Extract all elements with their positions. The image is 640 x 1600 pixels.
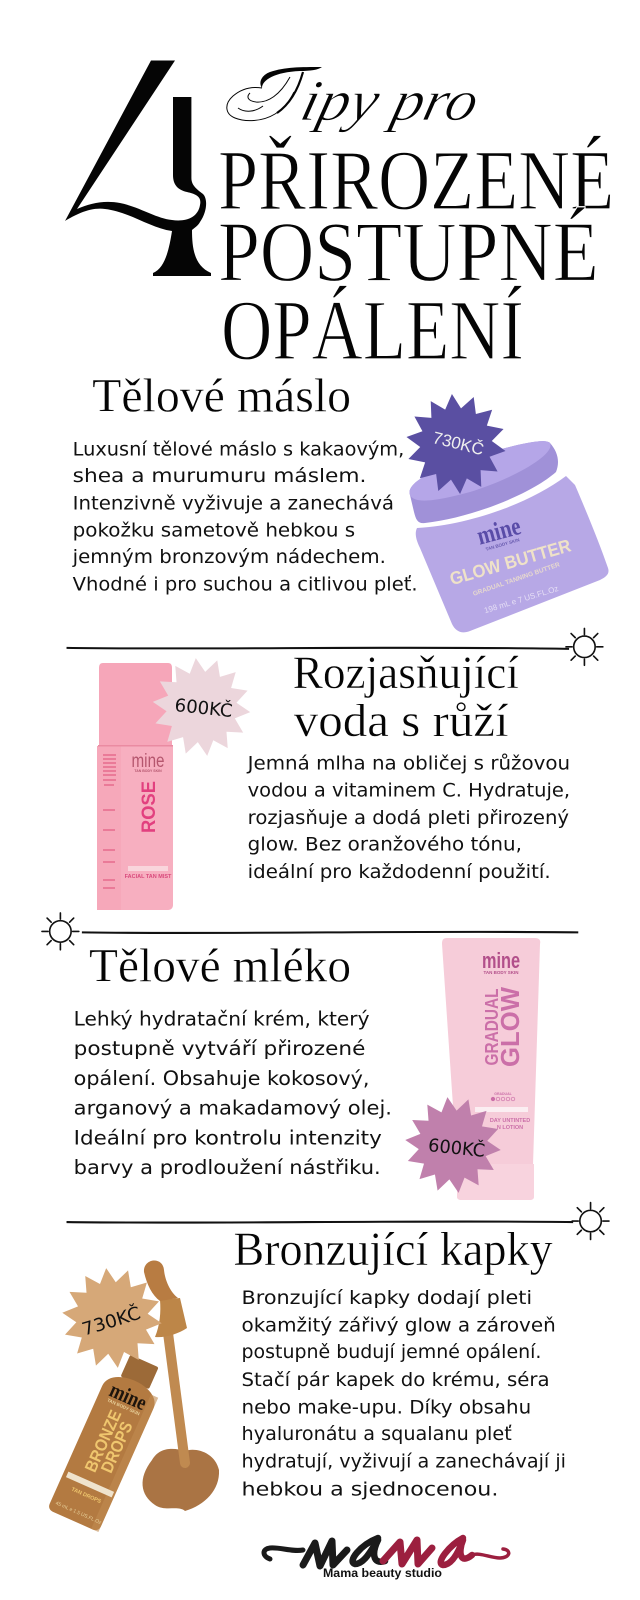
price badge: 730 Kč — [400, 389, 512, 499]
bottle: mine — [106, 1377, 151, 1415]
description: Tělové máslo: jemným bronzovým nádechem. — [72, 547, 386, 568]
description: Tělové mléko — [74, 1008, 392, 1179]
description: Tělové mléko: barvy a prodloužení nástřiku. — [74, 1156, 381, 1179]
description: Rozjasňující voda — [247, 754, 570, 883]
product: Gradual Glow lotion tube: DAY UNTINTED — [490, 1118, 530, 1124]
product: Glow Butter jar: 198 mL e 7 US.FL.Oz — [483, 584, 559, 615]
section 3: Tělové mléko — [74, 938, 540, 1200]
product: Gradual Glow lotion tube: N LOTION — [497, 1125, 523, 1131]
price badge: 600 Kč — [148, 654, 255, 760]
heading: Tělové mléko: Tělové mléko — [89, 940, 351, 993]
bottle: BRONZE — [81, 1407, 125, 1475]
heading: Rozjasňující voda s růží: voda s růží — [294, 695, 509, 747]
product: Gradual Glow lotion tube: GLOW — [495, 987, 525, 1067]
description: Tělové máslo: Intenzivně vyživuje a zanechává — [73, 494, 394, 515]
bottle: TAN DROPS — [70, 1487, 102, 1505]
logo: Mama beauty studio — [264, 1538, 509, 1580]
product swatch blob — [143, 1449, 219, 1511]
section 2: Rozjasňující voda s růží — [97, 647, 570, 910]
icon: sun — [42, 913, 79, 950]
title block — [65, 60, 614, 378]
logo: Mama beauty studio: Mama beauty studio — [323, 1566, 442, 1580]
description: Rozjasňující voda: ideální pro každodenní použití. — [248, 862, 551, 883]
description: Bronzující kapky: Bronzující kapky dodají pleti — [242, 1288, 532, 1309]
description: Bronzující kapky — [242, 1288, 566, 1500]
description: Bronzující kapky: nebo make-upu. Díky obsahu — [242, 1397, 531, 1418]
description: Rozjasňující voda: Jemná mlha na obličej s růžovou — [247, 754, 570, 775]
icon: sun — [566, 628, 603, 665]
product: Bronze Drops bottle and dropper — [47, 1260, 219, 1532]
script line: Tipy pro — [222, 60, 486, 137]
description: Tělové mléko: arganový a makadamový olej. — [74, 1097, 392, 1120]
heading: Tělové máslo: Tělové máslo — [92, 369, 351, 422]
large decorative numeral 4 — [65, 61, 211, 320]
product: Gradual Glow lotion tube: GRADUAL — [482, 989, 502, 1066]
dropper rod — [168, 1333, 185, 1463]
description: Bronzující kapky: hyaluronátu a squalanu pleť — [242, 1424, 512, 1445]
heading: Rozjasňující voda s růží — [293, 647, 519, 747]
product: Glow Butter jar: TAN BODY SKIN — [485, 537, 520, 552]
description: Tělové máslo: shea a murumuru máslem. — [73, 466, 366, 487]
description: Bronzující kapky: hebkou a sjednocenou. — [242, 1479, 498, 1500]
description: Tělové máslo: pokožku sametově hebkou s — [73, 520, 355, 541]
heading: Bronzující kapky: Bronzující kapky — [233, 1223, 553, 1276]
product: Glow Butter jar: GRADUAL TANNING BUTTER — [472, 561, 561, 598]
divider with sun 3 — [67, 1203, 609, 1239]
product: Gradual Glow lotion tube — [442, 938, 540, 1200]
bottle — [47, 1349, 170, 1532]
divider with sun 2 — [42, 913, 578, 950]
price badge: 600 Kč: 600KČ — [174, 694, 234, 722]
headline: POSTUPNÉ: POSTUPNÉ — [218, 203, 599, 299]
description: Tělové máslo: Vhodné i pro suchou a citlivou pleť. — [73, 575, 418, 596]
bottle: DROPS — [97, 1419, 137, 1476]
headline: OPÁLENÍ: OPÁLENÍ — [221, 282, 524, 378]
product: Glow Butter jar: GLOW BUTTER — [448, 535, 573, 589]
product: Gradual Glow lotion tube: GRADUAL — [494, 1092, 513, 1096]
price badge: 730 Kč: 730KČ — [79, 1302, 143, 1341]
description: Bronzující kapky: hydratují, vyživují a zanechávají ji — [242, 1452, 566, 1473]
description: Rozjasňující voda: rozjasňuje a dodá pleti přirozený — [248, 808, 569, 829]
product: Glow Butter jar: mine — [474, 511, 524, 550]
description: Tělové mléko: Ideální pro kontrolu intenzity — [74, 1126, 382, 1149]
product: Rose facial tan mist: mine — [132, 751, 165, 772]
section 1: Tělové máslo — [72, 369, 609, 632]
price badge: 600 Kč: 600KČ — [427, 1134, 486, 1162]
description: Tělové mléko: opálení. Obsahuje kokosový, — [74, 1067, 369, 1090]
product: Rose facial tan mist — [97, 663, 173, 910]
description: Tělové máslo — [72, 439, 418, 596]
product: Gradual Glow lotion tube: TAN BODY SKIN — [483, 970, 519, 975]
description: Rozjasňující voda: vodou a vitaminem C. Hydratuje, — [248, 780, 570, 801]
product: Rose facial tan mist: ROSE — [139, 781, 160, 833]
bottle: TAN BODY SKIN — [106, 1397, 141, 1416]
description: Tělové mléko: postupně vytváří přirozené — [74, 1037, 365, 1060]
description: Rozjasňující voda: glow. Bez oranžového tónu, — [248, 835, 522, 856]
description: Bronzující kapky: postupně budují jemné opálení. — [242, 1342, 541, 1363]
heading: Rozjasňující voda s růží: Rozjasňující — [293, 647, 519, 699]
product: Rose facial tan mist: FACIAL TAN MIST — [125, 874, 172, 880]
product: Gradual Glow lotion tube: mine — [482, 948, 520, 973]
description: Tělové máslo: Luxusní tělové máslo s kakaovým, — [73, 439, 404, 460]
price badge: 730 Kč — [57, 1264, 167, 1372]
price badge: 730 Kč: 730KČ — [431, 428, 486, 459]
price badge: 600 Kč — [400, 1093, 506, 1197]
section 4: Bronzující kapky — [47, 1223, 566, 1532]
description: Tělové mléko: Lehký hydratační krém, který — [74, 1008, 369, 1031]
description: Bronzující kapky: okamžitý zářivý glow a zároveň — [242, 1316, 556, 1337]
divider with sun 1 — [67, 628, 603, 665]
dropper collar — [155, 1298, 187, 1337]
description: Bronzující kapky: Stačí pár kapek do krému, séra — [242, 1370, 550, 1391]
icon: sun — [572, 1203, 609, 1239]
dropper bulb — [144, 1260, 178, 1301]
script line: Tipy pro: ipy pro — [295, 69, 486, 133]
bottle: 45 mL e 1.5 US.FL.Oz — [54, 1500, 103, 1526]
product: Rose facial tan mist: TAN BODY SKIN — [134, 769, 162, 773]
product: Glow Butter jar — [410, 441, 609, 632]
